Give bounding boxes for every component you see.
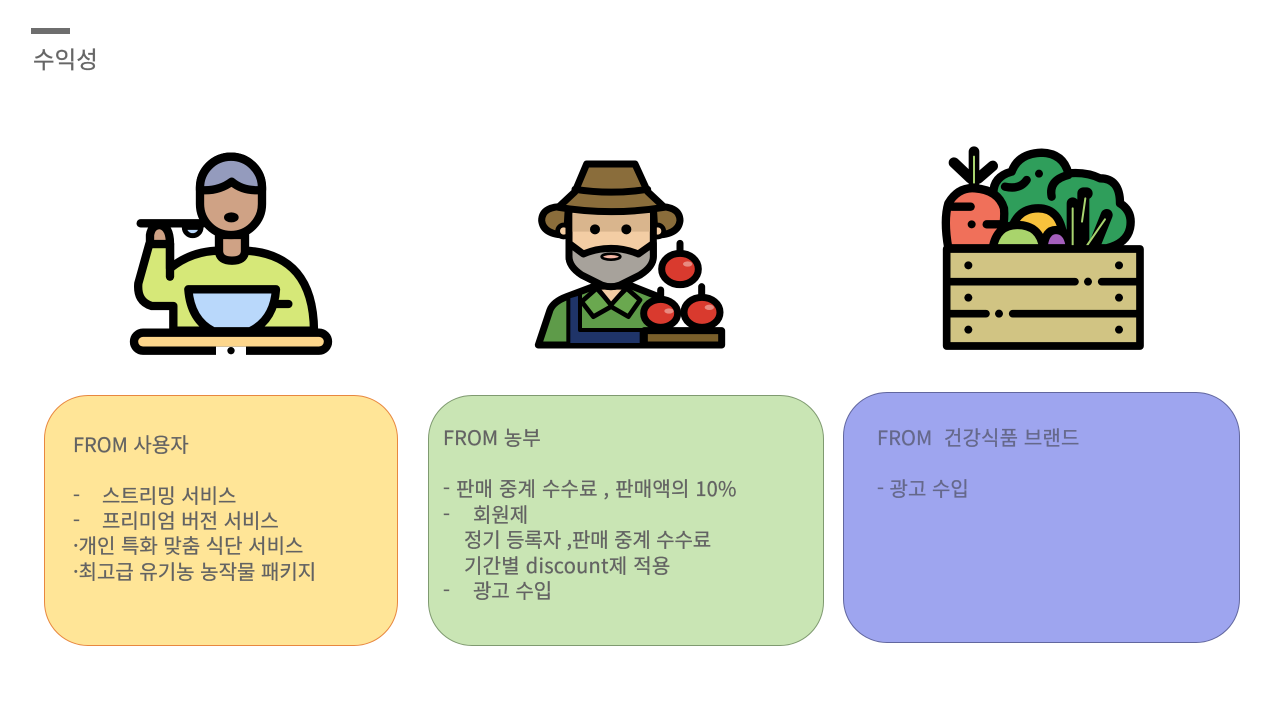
panel heading: FROM 건강식품 브랜드 — [877, 422, 1080, 451]
list item text: 프리미엄 버전 서비스 — [102, 505, 279, 534]
list item: - — [443, 499, 450, 528]
panel heading: FROM 농부 — [443, 422, 541, 451]
list item: - — [73, 505, 80, 534]
panel: from farmers — [428, 395, 824, 646]
icon: vegetable crate — [946, 152, 1140, 346]
list item: - — [73, 480, 80, 509]
list item: - 광고 수입 — [877, 473, 969, 502]
list item: ·최고급 유기농 농작물 패키지 — [73, 556, 316, 585]
title accent bar — [31, 28, 70, 34]
icon: farmer with apples — [538, 164, 722, 345]
panel: from health food brands — [843, 392, 1240, 643]
list item: - — [443, 575, 450, 604]
sub item: 정기 등록자 ,판매 중계 수수료 — [464, 524, 711, 553]
list item: ·개인 특화 맞춤 식단 서비스 — [73, 530, 303, 559]
list item text: 회원제 — [473, 499, 528, 528]
title: 수익성 — [33, 41, 98, 75]
panel heading: FROM 사용자 — [73, 429, 189, 458]
panel: from users — [44, 395, 398, 646]
icon: person eating — [134, 157, 328, 356]
sub item: 기간별 discount제 적용 — [464, 550, 671, 579]
list item: - 판매 중계 수수료 , 판매액의 10% — [443, 473, 737, 502]
list item text: 광고 수입 — [473, 575, 552, 604]
list item text: 스트리밍 서비스 — [102, 480, 236, 509]
